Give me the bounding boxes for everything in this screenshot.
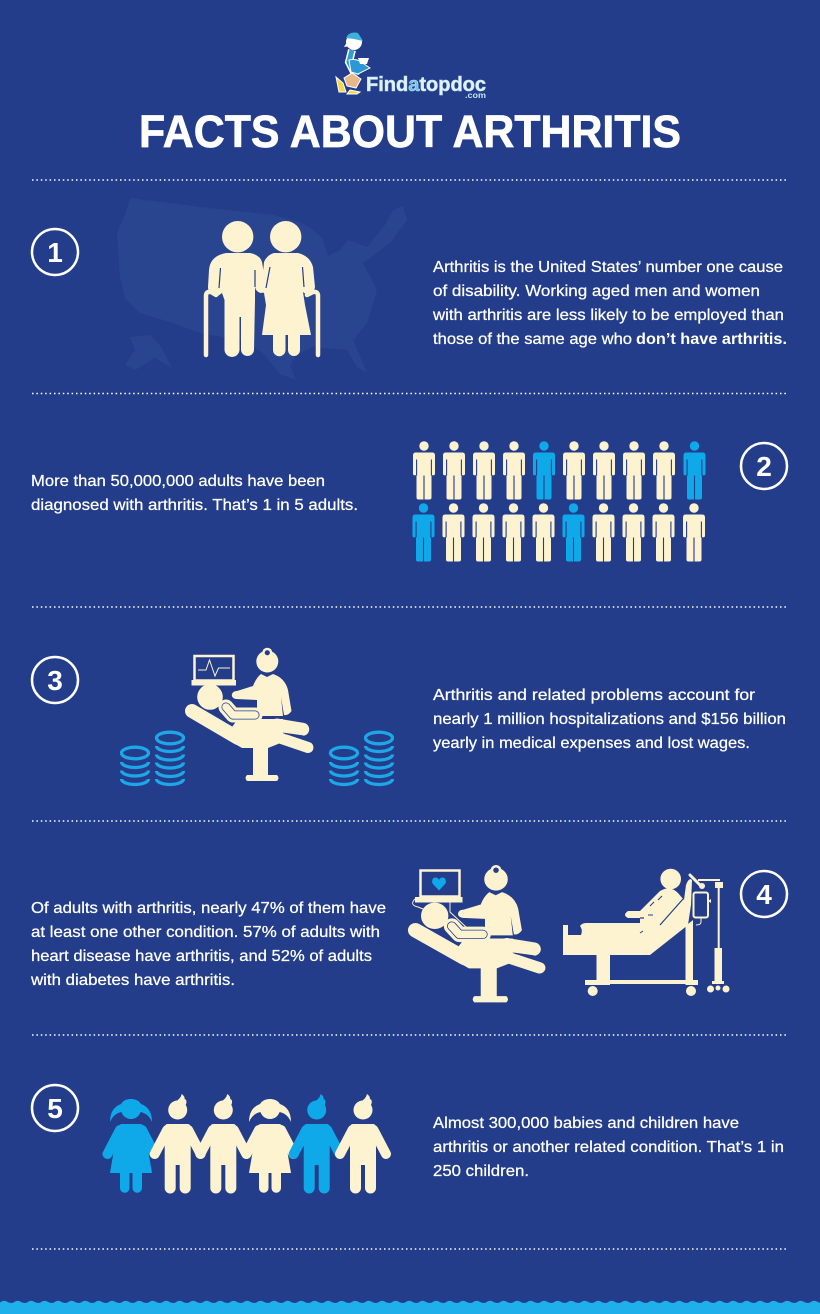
icon: coin stacks, right <box>330 732 392 784</box>
text block 4: with diabetes have arthritis. <box>30 972 235 989</box>
text block 5: arthritis or another related condition. That’s 1 in <box>433 1139 784 1156</box>
text block 1: Arthritis is the United States’ number one cause <box>433 259 783 276</box>
text block 1: don’t have arthritis. <box>636 331 787 348</box>
logo .com: .com <box>465 91 486 100</box>
text block 1: those of the same age who <box>433 331 632 348</box>
text block 5 <box>433 1115 784 1180</box>
icon: patient on chair with doctor <box>192 648 308 781</box>
footer wave band <box>0 1298 820 1314</box>
number 2: 2 <box>756 451 772 482</box>
panel 5: children <box>32 1085 784 1194</box>
number 4: 4 <box>756 879 772 910</box>
icon: patient in hospital bed with IV <box>563 869 730 996</box>
number 5: 5 <box>47 1093 63 1124</box>
panel 1: disability <box>32 198 787 380</box>
icon: duck mascot <box>336 33 370 94</box>
text block 3: yearly in medical expenses and lost wages. <box>433 735 750 752</box>
pictogram: six children holding hands <box>108 1094 386 1194</box>
icon: monitor with heart <box>413 870 466 927</box>
number 4 <box>741 871 787 917</box>
number 1: 1 <box>47 237 63 268</box>
map of United States <box>117 198 407 380</box>
text block 1: with arthritis are less likely to be employed than <box>432 307 784 324</box>
title: FACTS ABOUT ARTHRITIS <box>139 106 681 157</box>
icon: elderly couple with canes <box>206 221 318 357</box>
text block 3: nearly 1 million hospitalizations and $156 billion <box>433 711 786 728</box>
text block 5: Almost 300,000 babies and children have <box>433 1115 739 1132</box>
number 1 <box>32 229 78 275</box>
panel 3: hospitalizations and cost <box>32 648 786 784</box>
text block 2: diagnosed with arthritis. That’s 1 in 5 adults. <box>31 497 358 514</box>
pictogram: 20 adults, 4 highlighted <box>412 441 706 562</box>
number 5 <box>32 1085 78 1131</box>
text block 3: Arthritis and related problems account for <box>433 687 756 704</box>
text block 1: of disability. Working aged men and women <box>433 283 760 300</box>
text block 4: heart disease have arthritis, and 52% of adults <box>31 948 372 965</box>
number 3 <box>32 657 78 703</box>
panel 4: comorbid conditions <box>30 865 787 1002</box>
number 2 <box>741 443 787 489</box>
icon: monitor with ECG <box>192 656 236 686</box>
text block 4: Of adults with arthritis, nearly 47% of them have <box>31 900 386 917</box>
icon: patient on chair with doctor <box>415 865 540 1002</box>
icon: coin stacks, left <box>122 732 184 784</box>
panel 2: one in five adults <box>31 441 787 562</box>
text block 4: at least one other condition. 57% of adults with <box>31 924 380 941</box>
text block 5: 250 children. <box>433 1163 529 1180</box>
text block 2 <box>31 473 358 514</box>
logo wordmark: Findatopdoc <box>366 74 486 96</box>
text block 2: More than 50,000,000 adults have been <box>31 473 325 490</box>
text block 3 <box>433 687 786 752</box>
text block 4 <box>30 900 386 989</box>
number 3: 3 <box>47 665 63 696</box>
text block 1 <box>432 259 787 348</box>
logo: Findatopdoc <box>336 33 486 100</box>
